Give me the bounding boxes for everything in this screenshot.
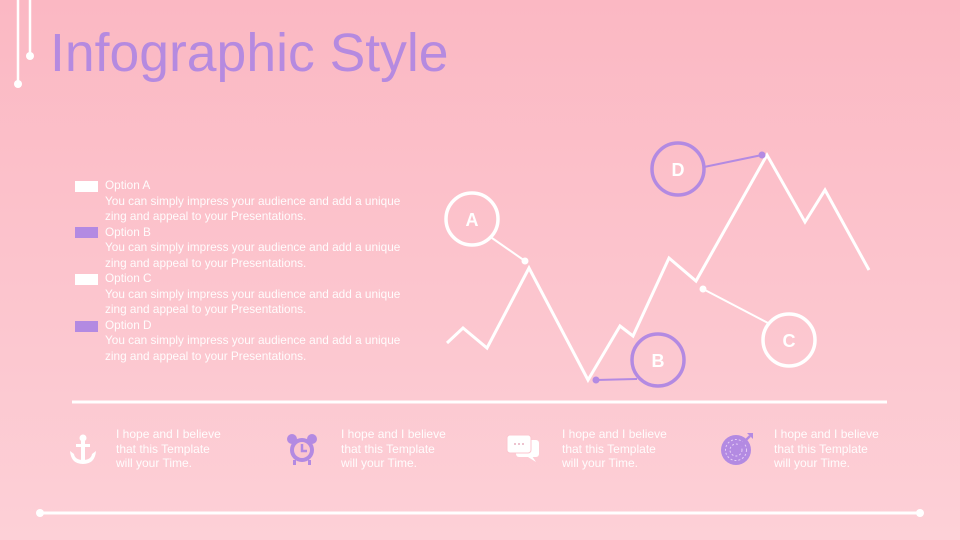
icon: anchor: [70, 434, 96, 464]
swatch B: [75, 227, 98, 238]
text 4: will your Time.: [774, 456, 850, 470]
legend text: You can simply impress your audience and add a unique: [105, 240, 400, 254]
text 1: [116, 427, 221, 470]
legend text: You can simply impress your audience and add a unique: [105, 286, 400, 300]
legend: [75, 178, 400, 362]
swatch D: [75, 321, 98, 332]
swatch A: [75, 181, 98, 192]
legend text: Option A: [105, 178, 150, 192]
callout C: C: [782, 331, 796, 351]
text 4: that this Template: [774, 442, 868, 456]
callout B: B: [652, 351, 664, 371]
text 4: [774, 427, 879, 470]
legend text: [105, 178, 400, 362]
callout B: [592, 334, 684, 386]
icon: target: [721, 433, 753, 465]
text 3: will your Time.: [562, 456, 638, 470]
icon: alarm clock: [287, 434, 317, 465]
legend text: zing and appeal to your Presentations.: [105, 256, 306, 270]
legend text: You can simply impress your audience and add a unique: [105, 194, 400, 208]
text 1: will your Time.: [116, 456, 192, 470]
text 1: I hope and I believe: [116, 427, 221, 441]
text 3: I hope and I believe: [562, 427, 667, 441]
callout D: D: [672, 160, 684, 180]
text 2: that this Template: [341, 442, 435, 456]
title: Infographic Style: [50, 24, 449, 83]
callout D: [652, 143, 766, 195]
text 2: will your Time.: [341, 456, 417, 470]
legend text: Option D: [105, 318, 152, 332]
legend text: You can simply impress your audience and add a unique: [105, 333, 400, 347]
legend text: zing and appeal to your Presentations.: [105, 302, 306, 316]
legend text: zing and appeal to your Presentations.: [105, 348, 306, 362]
text 4: I hope and I believe: [774, 427, 879, 441]
text 3: [562, 427, 667, 470]
text 3: that this Template: [562, 442, 656, 456]
legend text: zing and appeal to your Presentations.: [105, 209, 306, 223]
text 2: [341, 427, 446, 470]
icon: chat bubbles: [508, 436, 539, 462]
legend text: Option C: [105, 271, 152, 285]
legend text: Option B: [105, 224, 151, 238]
callout A: A: [466, 210, 478, 230]
callout A: [446, 193, 528, 264]
text 2: I hope and I believe: [341, 427, 446, 441]
callout C: [700, 286, 815, 366]
text 1: that this Template: [116, 442, 210, 456]
swatch C: [75, 274, 98, 285]
